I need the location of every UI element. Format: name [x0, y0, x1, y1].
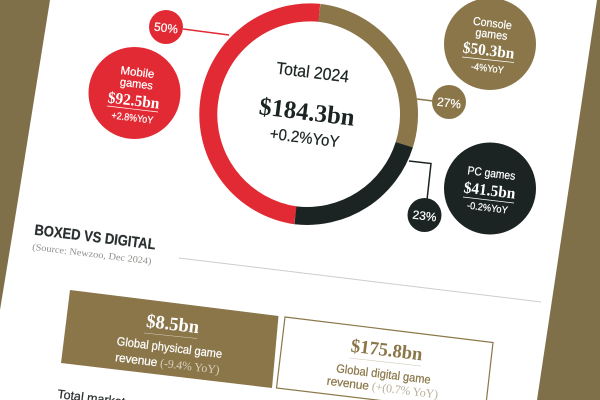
- bubble: console games: -4%YoY: [470, 62, 505, 77]
- physical description: Global physical game: [116, 334, 223, 361]
- bubble: mobile games: Mobile: [120, 65, 155, 81]
- bubble: PC games: PC games: [467, 165, 516, 183]
- donut centre total: [258, 59, 356, 151]
- badge: 50%: 50%: [153, 20, 179, 36]
- heading: boxed vs digital: BOXED VS DIGITAL: [33, 222, 157, 253]
- bubble: PC games: $41.5bn: [463, 179, 516, 203]
- badge: 50%: [149, 10, 183, 44]
- bubble: mobile games: [88, 47, 180, 139]
- bubble: console games: [444, 0, 536, 90]
- segment: PC 23%: [295, 145, 404, 216]
- bubble: console games: Console: [472, 16, 512, 32]
- donut chart: revenue share: [208, 12, 409, 216]
- segment: mobile 50%: [208, 12, 319, 215]
- badge: 27%: 27%: [436, 95, 462, 111]
- badge: 27%: [432, 85, 466, 119]
- right background panel: [537, 0, 600, 400]
- badge: 23%: [408, 198, 442, 232]
- total label: Total 2024: [275, 59, 350, 86]
- physical value: $8.5bn: [145, 311, 201, 338]
- source note: (Source: Newzoo, Dec 2024): [32, 242, 152, 267]
- bubble: PC games: -0.2%YoY: [466, 201, 509, 217]
- digital description: Global digital game: [335, 361, 432, 387]
- badge: 23%: 23%: [412, 208, 438, 224]
- left background panel: [0, 0, 50, 310]
- segment: console 27%: [319, 13, 409, 145]
- bubble: PC games: [444, 142, 536, 234]
- bubble: mobile games: $92.5bn: [107, 89, 160, 113]
- leader line: console: [417, 99, 433, 101]
- bubble: mobile games: games: [119, 77, 154, 93]
- digital value: $175.8bn: [350, 336, 424, 365]
- panel: physical game revenue: [61, 290, 278, 388]
- leader line: PC: [409, 161, 431, 200]
- total change: +0.2%YoY: [269, 126, 341, 151]
- leader line: mobile: [183, 29, 229, 35]
- total value: $184.3bn: [258, 93, 356, 132]
- panel: digital game revenue: [276, 317, 493, 400]
- bubble: mobile games: +2.8%YoY: [111, 111, 154, 127]
- physical change: revenue (-9.4% YoY): [115, 350, 220, 377]
- bubble: console games: $50.3bn: [462, 39, 515, 63]
- bubble: console games: games: [475, 27, 508, 43]
